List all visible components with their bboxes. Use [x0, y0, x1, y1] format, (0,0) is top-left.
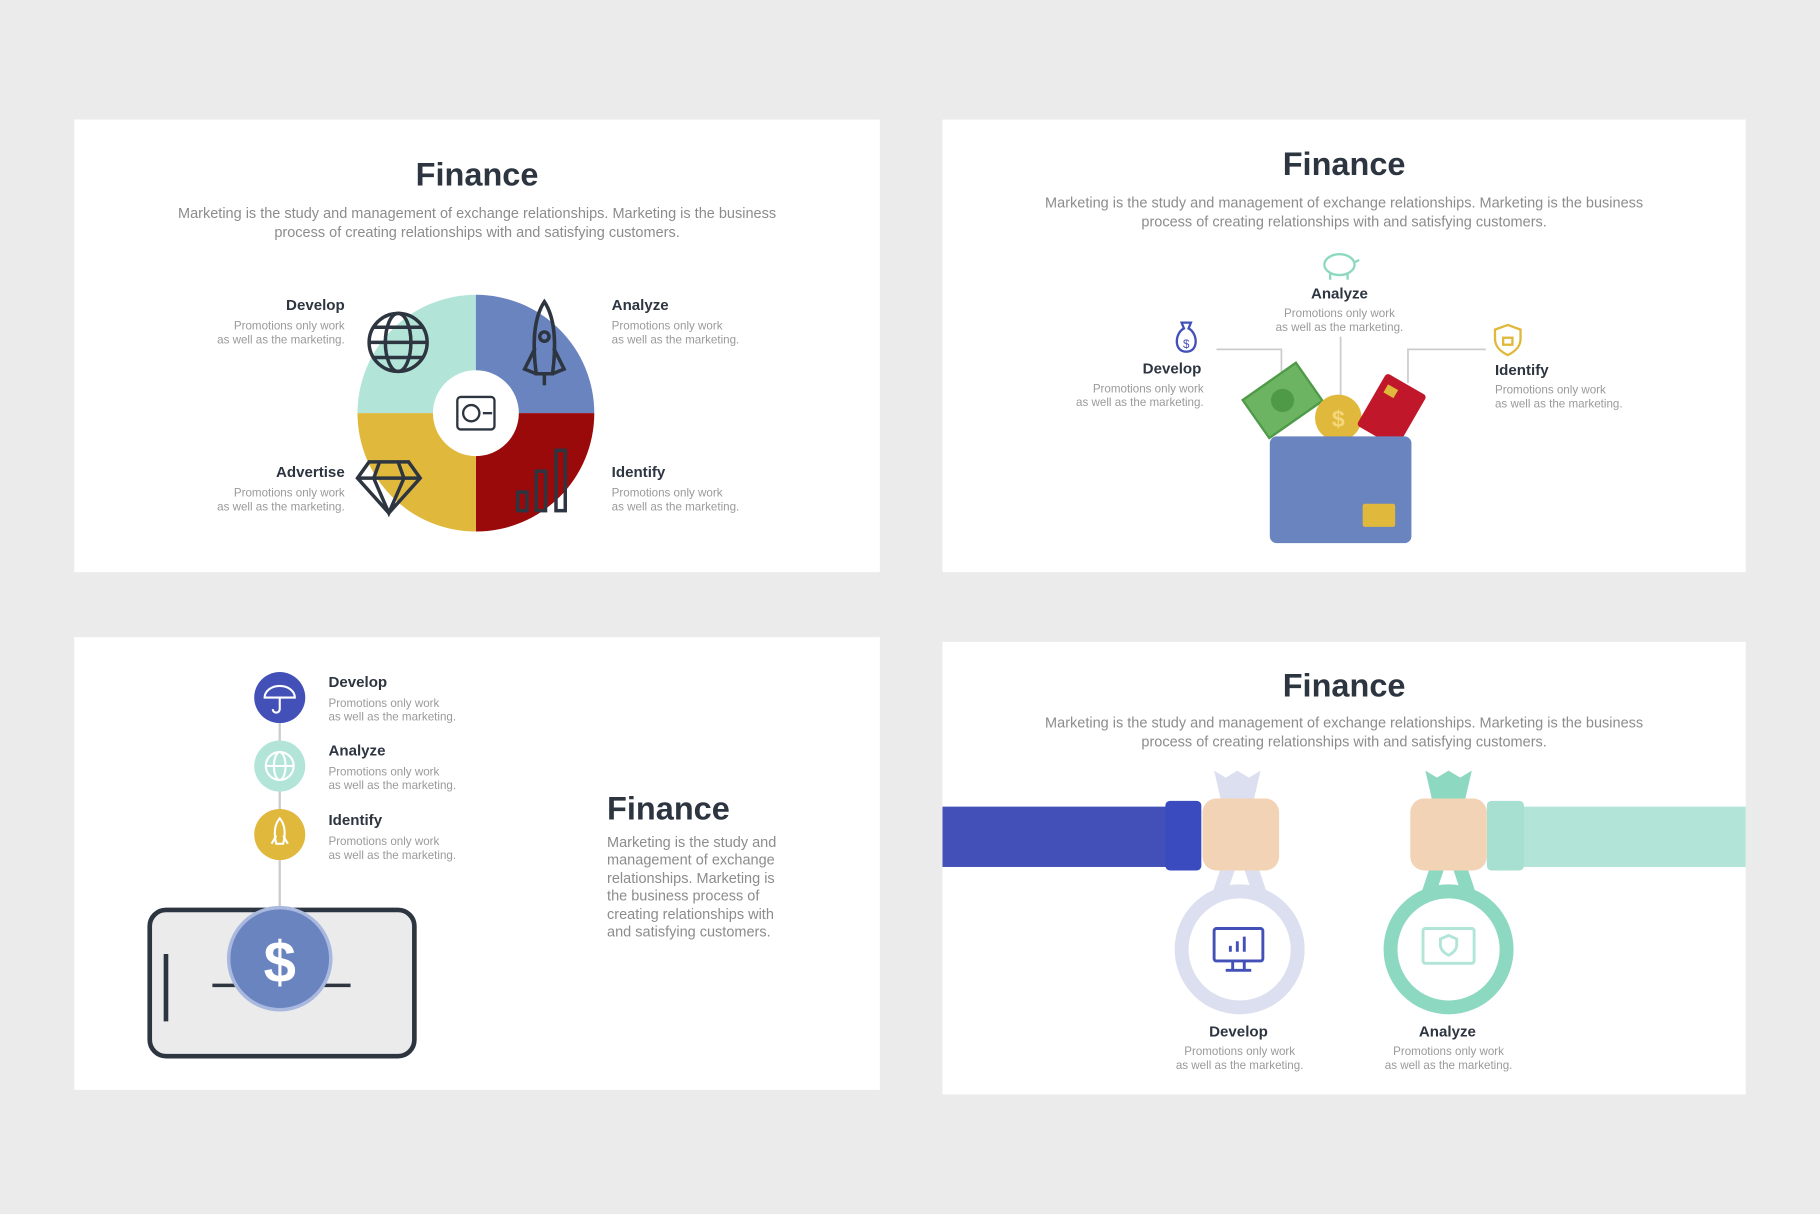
label: Identify: Identify [1495, 362, 1549, 379]
label: Analyze: as well as the marketing. [1276, 321, 1403, 334]
text block: creating relationships with [607, 907, 774, 923]
step: Identify: Identify [328, 812, 383, 829]
text block: and satisfying customers. [607, 925, 771, 941]
panel: wallet [942, 120, 1746, 572]
label: Analyze: Analyze [612, 297, 669, 314]
label: Develop [217, 297, 345, 347]
label: Develop: Develop [1209, 1023, 1268, 1040]
label: Analyze [1385, 1023, 1512, 1072]
label: Develop [1076, 361, 1204, 409]
label: Analyze: Promotions only work [1284, 307, 1395, 320]
text block [607, 835, 776, 941]
step: Develop [254, 672, 456, 724]
label: Analyze: as well as the marketing. [612, 334, 739, 347]
wallet illustration: $ [1332, 406, 1345, 432]
label: Develop: as well as the marketing. [1076, 396, 1204, 409]
label: Develop: Promotions only work [1093, 382, 1204, 395]
title: Finance [416, 157, 538, 193]
step: Analyze [254, 740, 456, 792]
label: Identify: Identify [612, 464, 666, 481]
label: Analyze: Analyze [1419, 1023, 1476, 1040]
label: Advertise: as well as the marketing. [217, 501, 345, 514]
label: Develop: Promotions only work [234, 320, 345, 333]
label: Identify [612, 464, 739, 514]
subtitle [1045, 716, 1643, 750]
title: Finance [1283, 146, 1405, 182]
label: Advertise: Advertise [276, 464, 345, 481]
icon: diamond [358, 462, 420, 513]
label: Analyze: as well as the marketing. [1385, 1059, 1512, 1072]
icon: bar chart [518, 450, 565, 511]
label: Develop: Develop [286, 297, 345, 314]
text block: management of exchange [607, 853, 775, 869]
step: Identify: as well as the marketing. [328, 849, 456, 862]
step: Develop: as well as the marketing. [328, 711, 456, 724]
label: Advertise [217, 464, 345, 514]
label: Develop: Develop [1143, 361, 1201, 378]
pie chart [358, 295, 594, 532]
label: Analyze [612, 297, 739, 347]
left hand with bag [942, 771, 1298, 1007]
label: Develop: as well as the marketing. [1176, 1059, 1303, 1072]
subtitle: process of creating relationships with and satisfying customers. [1141, 214, 1547, 230]
subtitle: Marketing is the study and management of exchange relationships. Marketing is the business [1045, 196, 1643, 212]
label: Analyze: Promotions only work [1393, 1045, 1504, 1058]
label: Develop: as well as the marketing. [217, 334, 345, 347]
step: Identify [254, 809, 456, 862]
panel: hands with money bags [942, 642, 1746, 1094]
panel: pie chart [74, 120, 880, 572]
title: Finance [607, 790, 730, 826]
icon: shield [1495, 325, 1521, 355]
subtitle: process of creating relationships with and satisfying customers. [1141, 734, 1547, 750]
subtitle: process of creating relationships with and satisfying customers. [274, 225, 680, 241]
label: Analyze [1276, 285, 1403, 334]
text block: Marketing is the study and [607, 835, 776, 851]
step: Analyze: Analyze [328, 743, 385, 760]
step: Analyze: Promotions only work [328, 765, 440, 778]
subtitle: Marketing is the study and management of exchange relationships. Marketing is the business [178, 206, 776, 222]
icon: piggy bank [1324, 254, 1359, 280]
label: Advertise: Promotions only work [234, 487, 345, 500]
icon: money bag [1177, 323, 1196, 352]
label: Identify: Promotions only work [1495, 383, 1606, 396]
wallet illustration [1243, 363, 1427, 543]
text block: relationships. Marketing is [607, 871, 775, 887]
phone with dollar coin [150, 908, 414, 1056]
label: Identify: Promotions only work [612, 487, 723, 500]
icon: rocket [525, 302, 564, 385]
step: Analyze: as well as the marketing. [328, 779, 456, 792]
label: Identify: as well as the marketing. [612, 501, 739, 514]
subtitle [178, 206, 776, 241]
title: Finance [1283, 667, 1405, 703]
label: Analyze: Promotions only work [612, 320, 723, 333]
panel: phone payment [74, 637, 880, 1090]
connectors [1216, 337, 1486, 400]
step: Develop: Develop [328, 674, 387, 691]
right hand with bag [1391, 771, 1746, 1007]
step: Identify: Promotions only work [328, 835, 440, 848]
subtitle: Marketing is the study and management of exchange relationships. Marketing is the business [1045, 716, 1643, 732]
subtitle [1045, 196, 1643, 230]
step: Develop: Promotions only work [328, 697, 440, 710]
phone with dollar coin: $ [264, 930, 296, 995]
label: Develop: Promotions only work [1184, 1045, 1295, 1058]
label: Develop [1176, 1023, 1303, 1072]
label: Analyze: Analyze [1311, 285, 1368, 302]
icon: money bag: $ [1183, 338, 1190, 351]
label: Identify [1495, 362, 1623, 410]
text block: the business process of [607, 889, 760, 905]
label: Identify: as well as the marketing. [1495, 397, 1623, 410]
icon: globe [369, 313, 427, 371]
